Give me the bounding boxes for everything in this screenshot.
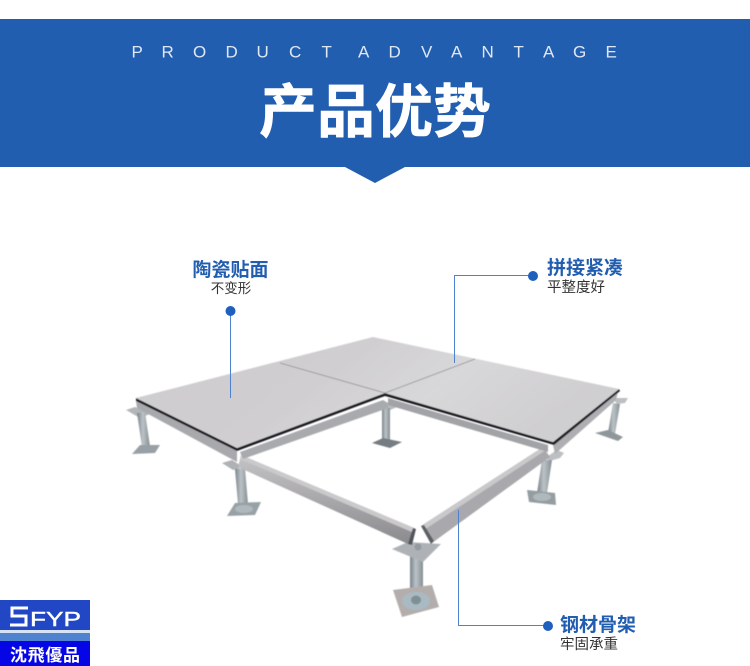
- callout: ceramic finish: [192, 258, 269, 398]
- marker dot: [528, 271, 538, 281]
- callout text: 牢固承重: [560, 636, 618, 653]
- front leg: [392, 542, 441, 617]
- marker dot: [226, 306, 236, 316]
- front-right leg: [527, 450, 564, 505]
- centre leg: [372, 403, 402, 448]
- marker dot: [543, 621, 553, 631]
- back-right leg: [595, 398, 628, 441]
- right support rail: [553, 392, 618, 454]
- leader line: [454, 276, 530, 363]
- product photo: raised floor: [126, 337, 628, 617]
- inner right rail: [388, 398, 548, 452]
- inner left rail: [240, 400, 388, 459]
- callout heading: 陶瓷贴面: [192, 258, 269, 281]
- ceramic panels: [136, 337, 619, 448]
- leader line: [230, 311, 232, 398]
- seam lines: [280, 359, 475, 393]
- callout text: 平整度好: [547, 279, 605, 296]
- tile edge: black laminate: [136, 389, 620, 451]
- callout heading: 拼接紧凑: [547, 256, 623, 279]
- logo chinese name: 沈飛優品: [10, 646, 80, 665]
- back-left leg: [126, 407, 160, 454]
- english subtitle: PRODUCTADVANTAGE: [132, 42, 617, 61]
- callout: steel frame: [458, 510, 636, 653]
- title: 产品优势: [259, 80, 491, 145]
- leader line: [458, 510, 545, 626]
- header banner: [0, 19, 750, 183]
- logo: [0, 600, 90, 666]
- front-left leg: [222, 460, 261, 516]
- callout heading: 钢材骨架: [560, 614, 636, 636]
- front-left beam: [238, 455, 416, 545]
- logo letter S: [10, 608, 28, 625]
- front-right beam: [421, 447, 550, 544]
- left support rail: [136, 401, 237, 462]
- logo letters: FYP: [30, 609, 81, 631]
- callout: tight joints: [454, 256, 623, 363]
- callout text: 不变形: [211, 281, 252, 296]
